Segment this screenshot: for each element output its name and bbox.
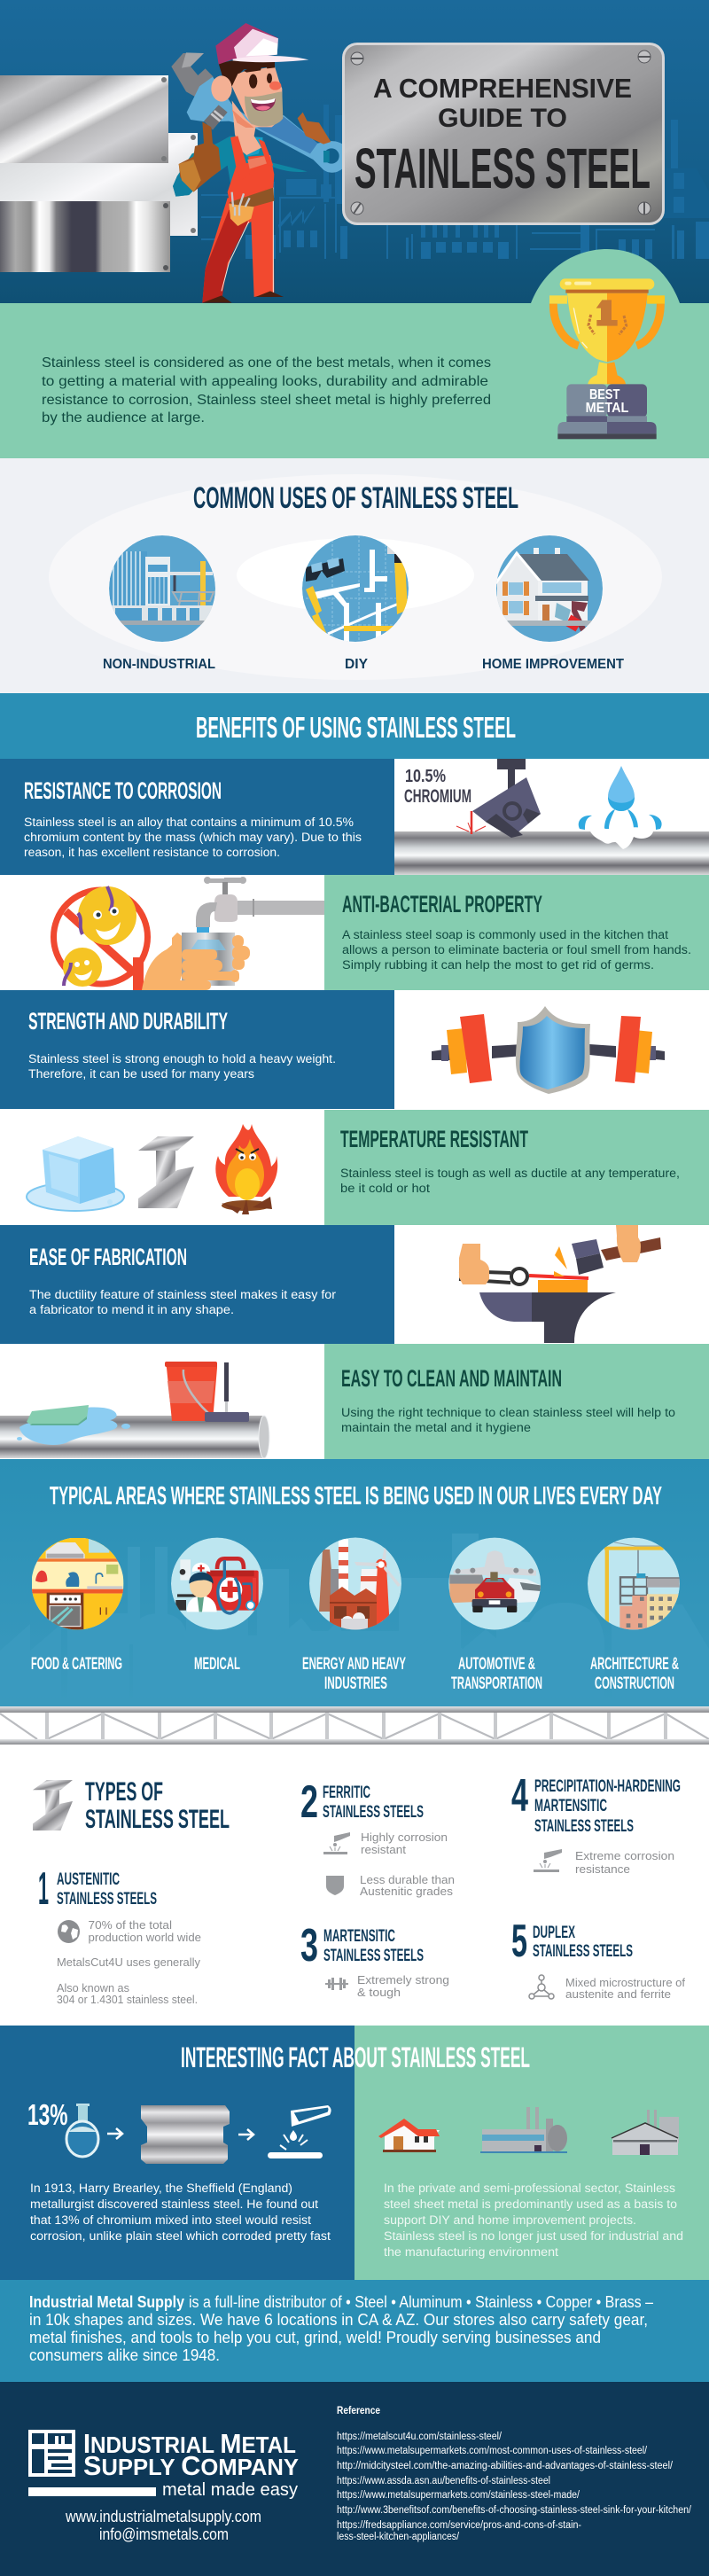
text: private sector fact: Stainless steel is no longer just used for industrial and [384,2229,683,2244]
illustration: dumbbell and shield [432,1006,665,1094]
heading: resistance to corrosion: RESISTANCE TO CORROSION [24,777,222,804]
text: company blurb: is a full-line distributor of • Steel • Aluminum • Stainless • Copper • Brass – [189,2293,653,2311]
steel sheet: bottom striped [0,201,170,272]
panel: anti-bacterial property [53,875,709,990]
text: company blurb: Industrial Metal Supply [29,2293,184,2311]
panel: intro mint band [0,303,709,458]
text: resistance to corrosion [24,816,362,859]
type 3: martensitic: MARTENSITIC [323,1926,395,1946]
heading: types of stainless steel [85,1777,230,1834]
text: company blurb: metal finishes, and tools to help you cut, grind, weld! Proudly serving businesses and [29,2329,601,2346]
type 4: precipitation-hardening: resistance [575,1862,630,1876]
icon: shield [326,1876,344,1895]
illustration: pipe with chromium tool and water drop: CHROMIUM [404,786,471,807]
type 1: austenitic: 304 or 1.4301 stainless steel. [57,1993,198,2006]
panel: easy to clean and maintain [0,1344,709,1459]
text: temperature: Stainless steel is tough as well as ductile at any temperature, [340,1167,680,1180]
icon: automotive and transportation [448,1538,541,1630]
heading: types of stainless steel: STAINLESS STEEL [85,1805,230,1834]
reference list [337,2406,692,2542]
contact details [65,2508,261,2543]
text: 1913 fact [30,2182,331,2244]
steel sheets [0,75,198,272]
heading: strength: STRENGTH AND DURABILITY [28,1008,228,1034]
type 2: ferritic: Highly corrosion [361,1831,448,1844]
label: medical: MEDICAL [194,1654,240,1674]
label: non-industrial: NON-INDUSTRIAL [103,657,215,672]
panel: resistance to corrosion [0,759,709,875]
reference list: Reference [337,2406,380,2416]
panel: interesting fact [0,2026,709,2280]
type 1: austenitic: 70% of the total [89,1918,172,1932]
type 5: duplex: DUPLEX [533,1923,575,1942]
type 1: austenitic: Also known as [57,1981,129,1994]
text: anti-bacterial: Simply rubbing it can help the most to get rid of germs. [342,958,654,972]
text: strength [28,1052,336,1081]
steel sheet: middle [0,133,198,236]
illustration: anvil, tongs and hammer [459,1225,661,1343]
panel: footer [0,2382,709,2576]
icon: factory [480,2107,567,2153]
icon: home improvement house [495,535,604,642]
type 1: austenitic [38,1863,201,2006]
text: resistance to corrosion: Stainless steel is an alloy that contains a minimum of 10.5% [24,816,354,829]
reference list: http://midcitysteel.com/the-amazing-abilities-and-advantages-of-stainless-steel/ [337,2461,674,2471]
panel: types of stainless steel [0,1745,709,2026]
text: private sector fact: In the private and semi-professional sector, Stainless [384,2182,675,2196]
text: private sector fact: the manufacturing environment [384,2245,558,2260]
label: automotive and transportation: AUTOMOTIVE & [458,1654,535,1674]
icon: steel I-beam [141,2105,230,2164]
text: fabrication: The ductility feature of stainless steel makes it easy for [29,1288,337,1301]
icon: best metal trophy: METAL [586,401,629,416]
text: temperature: be it cold or hot [340,1182,430,1195]
heading: types of stainless steel: TYPES OF [85,1777,163,1807]
type 5: duplex: Mixed microstructure of [565,1976,685,1989]
text: clean [341,1406,675,1434]
icon: house [378,2119,440,2152]
type 2: ferritic: Less durable than [360,1873,455,1886]
title line: Guide to: GUIDE TO [438,104,567,133]
reference list: https://www.assda.asn.au/benefits-of-stainless-steel [337,2476,550,2486]
icon: warehouse [612,2110,679,2155]
contact details: info@imsmetals.com [99,2525,229,2543]
reference list: https://www.metalsupermarkets.com/most-common-uses-of-stainless-steel/ [337,2446,648,2456]
panel: header background [0,0,709,303]
logo: tagline [28,2480,298,2500]
panel: strength and durability [0,990,665,1109]
illustration: worker with wrench [171,23,349,303]
label: architecture and construction [590,1654,679,1693]
type 2: ferritic: STAINLESS STEELS [323,1802,424,1822]
arrow [238,2129,253,2140]
arrow [107,2128,122,2139]
label: automotive and transportation: TRANSPORTATION [451,1674,542,1693]
intro text: resistance to corrosion, Stainless steel sheet metal is highly preferred [42,393,491,408]
type 1: austenitic: STAINLESS STEELS [57,1889,157,1909]
icon: pouring acid drop [268,2105,331,2158]
intro text: to getting a material with appealing looks, durability and admirable [42,374,488,389]
panel: temperature resistant [27,1110,709,1225]
panel: benefits heading band [0,693,709,759]
logo: IMS mark [28,2430,75,2477]
trophy arch [531,249,680,303]
text: anti-bacterial: allows a person to eliminate bacteria or foul smell from hands. [342,943,691,956]
type 4: precipitation-hardening: MARTENSITIC [534,1796,607,1815]
heading: fabrication: EASE OF FABRICATION [29,1244,187,1270]
intro text: Stainless steel is considered as one of the best metals, when it comes [42,355,491,371]
label: food and catering: FOOD & CATERING [31,1654,122,1674]
type 4: precipitation-hardening [511,1770,681,1876]
title plate [342,43,665,225]
panel: common uses [0,458,709,693]
text: 1913 fact: that 13% of chromium mixed into steel would resist [30,2213,311,2228]
label: DIY: DIY [345,657,369,672]
icon: globe [58,1920,80,1943]
label: automotive and transportation [451,1654,542,1693]
text: temperature [340,1167,680,1195]
reference list: https://www.metalsupermarkets.com/stainless-steel-made/ [337,2490,580,2501]
text: clean: Using the right technique to clean stainless steel will help to [341,1406,675,1419]
icon: food and catering kitchen [32,1538,123,1629]
type 4: precipitation-hardening: 4 [511,1770,528,1822]
icon: microstructure [529,1975,554,1999]
logo: tagline: metal made easy [162,2480,298,2500]
type 2: ferritic [300,1776,455,1898]
illustration: ice, steel beam and fire [27,1124,277,1214]
type 3: martensitic: & tough [357,1986,401,1999]
icon: architecture and construction [588,1538,680,1630]
label: energy and heavy industries [302,1654,406,1693]
reference list: https://metalscut4u.com/stainless-steel/ [337,2432,503,2442]
intro text: by the audience at large. [42,410,205,425]
type 2: ferritic: 2 [300,1776,318,1828]
text: 1913 fact: metallurgist discovered stainless steel. He found out [30,2197,318,2212]
type 3: martensitic [300,1920,449,1999]
text: 1913 fact: corrosion, unlike plain steel which corroded pretty fast [30,2229,331,2244]
type 1: austenitic: 1 [38,1863,49,1915]
text: resistance to corrosion: chromium content by the mass (which may vary). Due to this [24,831,362,844]
type 4: precipitation-hardening: Extreme corrosion [575,1849,674,1862]
icon: dumbbell [325,1978,348,1990]
text: strength: Stainless steel is strong enough to hold a heavy weight. [28,1052,336,1066]
logo: company name: INDUSTRIAL METAL [83,2428,296,2459]
logo: company name: SUPPLY COMPANY [83,2450,299,2481]
text: fabrication [29,1288,337,1316]
label: energy and heavy industries: ENERGY AND HEAVY [302,1654,406,1674]
type 1: austenitic: AUSTENITIC [57,1870,120,1889]
text: clean: maintain the metal and it hygiene [341,1421,531,1434]
steel sheet: top [0,75,168,163]
type 2: ferritic: resistant [361,1843,406,1856]
illustration: bacteria, faucet and hand [53,877,324,990]
panel: company blurb [0,2280,709,2382]
text: fabrication: a fabricator to mend it in any shape. [29,1303,234,1316]
panel: ease of fabrication [0,1225,661,1344]
factory skyline silhouette [0,1534,709,1698]
plate screws [351,51,651,215]
type 3: martensitic: Extremely strong [357,1973,449,1987]
reference list: https://fredsappliance.com/service/pros-and-cons-of-stain- [337,2520,581,2531]
type 5: duplex: austenite and ferrite [565,1987,671,2001]
text: 1913 fact: In 1913, Harry Brearley, the Sheffield (England) [30,2182,292,2196]
heading: anti-bacterial: ANTI-BACTERIAL PROPERTY [342,891,542,917]
illustration: pipe with chromium tool and water drop [394,759,709,875]
text: anti-bacterial [342,928,691,972]
steel truss divider [0,1706,709,1745]
text: private sector fact [384,2182,683,2260]
type 1: austenitic: production world wide [89,1931,201,1944]
icon: best metal trophy [549,278,665,439]
heading: clean: EASY TO CLEAN AND MAINTAIN [341,1365,562,1392]
label: home improvement: HOME IMPROVEMENT [482,657,625,672]
reference list: less-steel-kitchen-appliances/ [337,2532,460,2542]
text: anti-bacterial: A stainless steel soap is commonly used in the kitchen that [342,928,668,941]
contact details: www.industrialmetalsupply.com [65,2508,261,2525]
icon: best metal trophy: BEST [589,387,620,402]
text: private sector fact: steel sheet metal is predominantly used as a basis to [384,2197,677,2212]
icon: corrosion drop [534,1849,562,1872]
type 5: duplex: STAINLESS STEELS [533,1941,633,1961]
type 2: ferritic: FERRITIC [323,1783,370,1802]
type 2: ferritic: Austenitic grades [360,1885,454,1898]
panel: typical areas [0,1459,709,1706]
icon: corrosion drop [323,1832,350,1854]
text: company blurb: in 10k shapes and sizes. We have 6 locations in CA & AZ. Our stores also carry safety gear, [29,2311,648,2329]
title line: A Comprehensive: A COMPREHENSIVE [373,73,632,104]
icon: steel beam [33,1780,73,1831]
type 3: martensitic: 3 [300,1920,318,1971]
type 5: duplex: 5 [511,1916,527,1967]
intro text [42,355,491,425]
type 1: austenitic: MetalsCut4U uses generally [57,1955,200,1969]
text: company blurb [29,2293,653,2364]
icon: DIY blueprint [302,535,412,645]
illustration: pipe, bucket, mop and sponge [0,1362,269,1458]
factory skyline silhouette [201,105,709,259]
panel: white benefit backdrop [0,759,709,1459]
icon: medical kit and nurse [171,1538,263,1630]
type 4: precipitation-hardening: STAINLESS STEELS [534,1816,634,1836]
text: strength: Therefore, it can be used for many years [28,1067,254,1081]
reference list: http://www.3benefitsof.com/benefits-of-choosing-stainless-steel-sink-for-your-kitchen/ [337,2505,692,2516]
logo: company name [83,2428,299,2481]
text: private sector fact: support DIY and home improvement projects. [384,2213,636,2228]
label: energy and heavy industries: INDUSTRIES [324,1674,387,1693]
type 5: duplex [511,1916,685,2001]
heading: temperature: TEMPERATURE RESISTANT [340,1126,528,1152]
label: 13 percent: 13% [27,2098,67,2131]
illustration: pipe with chromium tool and water drop: 10.5% [405,767,446,786]
text: company blurb: consumers alike since 1948. [29,2346,220,2364]
icon: energy and heavy industries [309,1537,401,1631]
type 3: martensitic: STAINLESS STEELS [323,1946,424,1965]
text: resistance to corrosion: reason, it has excellent resistance to corrosion. [24,846,280,859]
icon: flask [66,2104,98,2157]
icon: non-industrial buildings [109,535,216,642]
